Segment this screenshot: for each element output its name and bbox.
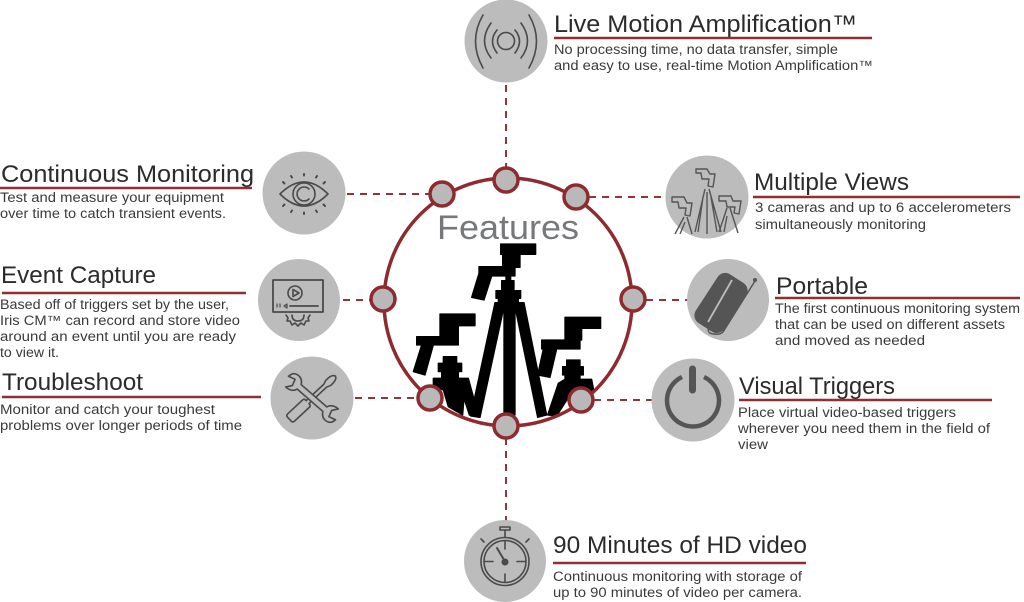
description: [0, 402, 242, 433]
panel: Portable: [687, 259, 1020, 348]
description: simultaneously monitoring: [755, 217, 926, 232]
heading: Portable: [776, 273, 868, 300]
description: 3 cameras and up to 6 accelerometers: [755, 200, 1011, 215]
icon: power button: [652, 358, 734, 442]
panel: 90 Minutes of HD video: [464, 520, 807, 602]
description: The first continuous monitoring system: [775, 301, 1020, 316]
description: problems over longer periods of time: [0, 418, 242, 433]
description: and easy to use, real-time Motion Amplification™: [554, 58, 873, 73]
panel: Live Motion Amplification: [464, 0, 873, 82]
icon: stopwatch: [464, 520, 546, 602]
description: [0, 190, 226, 221]
description: Place virtual video-based triggers: [738, 405, 956, 420]
description: and moved as needed: [775, 333, 925, 348]
tripod silhouettes: [413, 244, 601, 417]
description: view: [738, 437, 768, 452]
description: [737, 405, 990, 452]
description: [755, 200, 1011, 232]
description: Monitor and catch your toughest: [0, 402, 215, 417]
icon: tripod bag: [687, 259, 769, 341]
icon: video monitor with gear: [258, 259, 340, 341]
heading: Troubleshoot: [2, 369, 143, 396]
panel: Troubleshoot: [0, 356, 354, 440]
heading: Visual Triggers: [739, 373, 895, 400]
description: wherever you need them in the field of: [737, 421, 990, 436]
description: to view it.: [0, 345, 59, 360]
heading: 90 Minutes of HD video: [553, 532, 807, 559]
icon: three tripod outlines: [666, 156, 748, 238]
description: Based off of triggers set by the user,: [0, 297, 229, 312]
main ring: [384, 178, 632, 426]
center tripod: [471, 244, 547, 417]
icon: eye: [262, 152, 346, 234]
panel: Continuous Monitoring: [0, 152, 346, 234]
heading: Event Capture: [1, 262, 156, 289]
heading: Continuous Monitoring: [1, 161, 254, 188]
description: Iris CM™ can record and store video: [0, 313, 240, 328]
center heading: Features: Features: [437, 209, 579, 247]
description: Continuous monitoring with storage of: [553, 569, 802, 584]
description: over time to catch transient events.: [0, 206, 226, 221]
ring nodes: [371, 168, 645, 438]
panel: Event Capture: [0, 259, 340, 360]
icon: crossed wrench and screwdriver: [270, 356, 354, 440]
icon: vibration waves: [464, 0, 548, 82]
heading: Multiple Views: [754, 169, 909, 196]
description: [554, 42, 873, 73]
description: [775, 301, 1020, 348]
heading: Live Motion Amplification™: [554, 11, 857, 38]
connector lines: [343, 85, 687, 522]
description: Test and measure your equipment: [0, 190, 224, 205]
description: around an event until you are ready: [0, 329, 236, 344]
description: No processing time, no data transfer, simple: [554, 42, 838, 57]
panel: Visual Triggers: [652, 358, 992, 452]
right tripod: [538, 317, 601, 416]
panel: Multiple Views: [666, 156, 1020, 238]
description: that can be used on different assets: [775, 317, 1005, 332]
left tripod: [413, 314, 479, 417]
description: [0, 297, 240, 360]
description: [553, 569, 802, 600]
description: up to 90 minutes of video per camera.: [553, 585, 802, 600]
